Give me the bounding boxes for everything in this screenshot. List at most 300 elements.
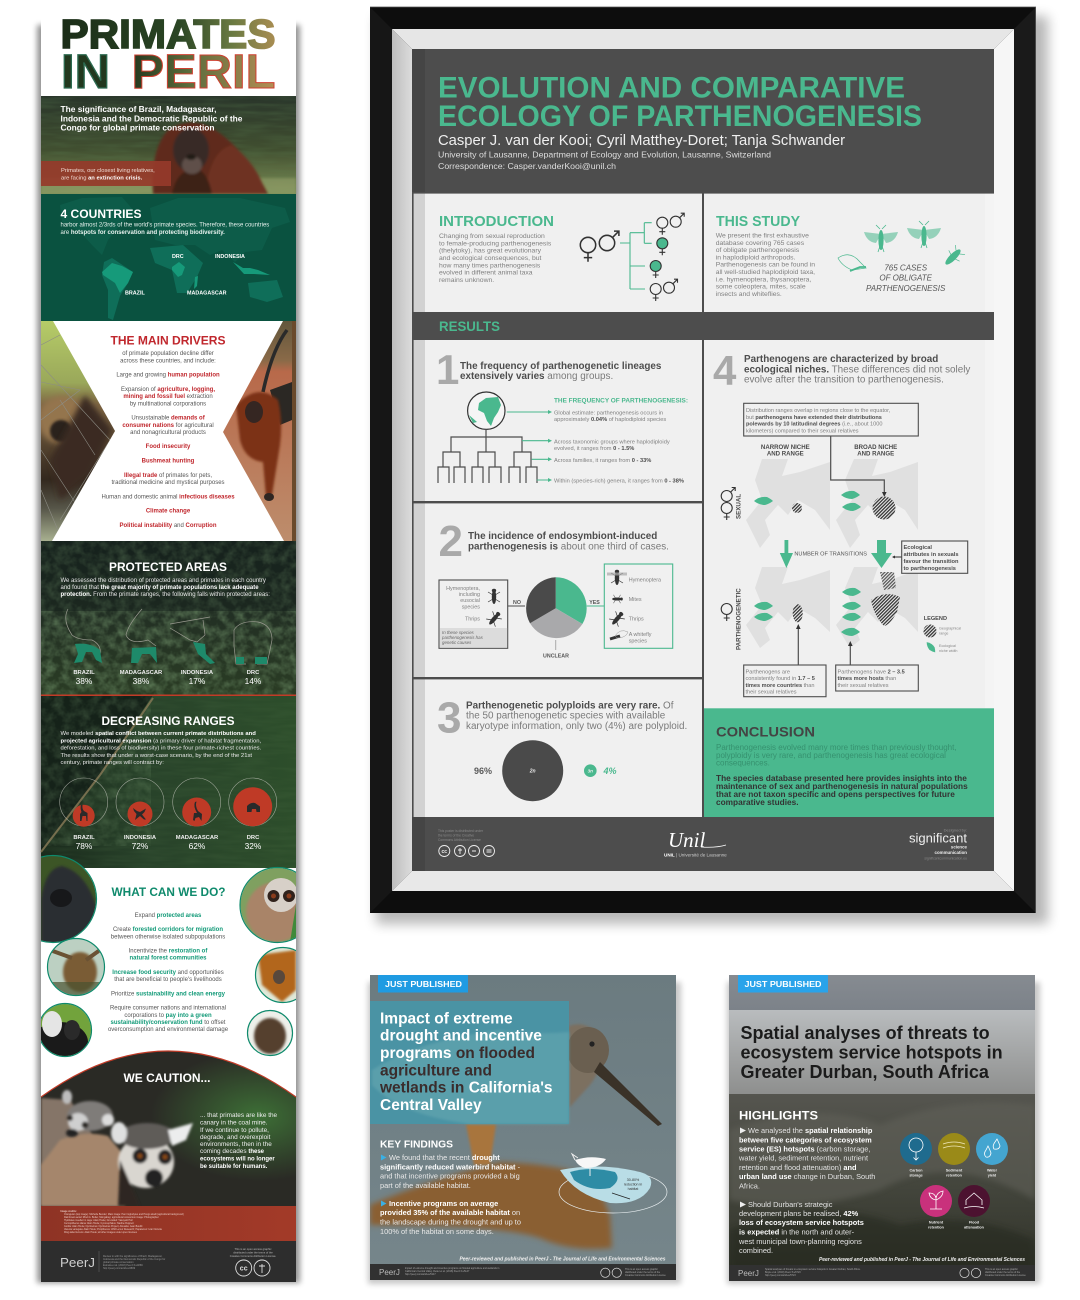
row label: parthenogenetic: PARTHENOGENETIC: [736, 588, 742, 650]
range contraction values: 32%: [245, 841, 262, 851]
arrows: number of transitions: NUMBER OF TRANSITIONS: [794, 552, 867, 558]
column labels: BROAD NICHE: [854, 444, 897, 451]
box: no endosymbionts: [439, 580, 508, 648]
panel: parthenogenesis poster: [370, 7, 1036, 913]
footer: Spatial analyses of threats to ecosystem service hotspots in Greater Durban, South Africa.: [765, 1268, 861, 1271]
arrows: green: [507, 410, 552, 482]
text: conclusion bold: that are not taxon specific and opens perspectives for future: [716, 789, 955, 799]
footer: http://peerj.com/articles/5147: [405, 1273, 436, 1276]
text: caution: degrade, and overexploit: [200, 1134, 271, 1141]
text: key findings: provided 35% of the available habitat on: [380, 1208, 520, 1217]
logo: unil: [664, 828, 727, 858]
logo: unil: UNIL | Université de Lausanne: [664, 852, 727, 858]
panel: result 3: [437, 694, 687, 801]
heading: protected areas: PROTECTED AREAS: [109, 561, 227, 574]
panel: result 2: [438, 517, 673, 660]
text: drivers list: Bushmeat hunting: [142, 458, 195, 464]
title box: Impact of extreme: [380, 1010, 513, 1027]
text: protected areas intro: protection. From the primate ranges, the following falls within protected areas:: [60, 592, 270, 598]
text: this study body: database covering 765 cases: [716, 240, 805, 247]
photo: hills: [729, 1102, 1035, 1206]
range contraction values: [73, 835, 262, 851]
protected area values: [73, 670, 262, 686]
text: highlights: We analysed the spatial relationship: [748, 1126, 872, 1135]
text: introduction body: remains unknown.: [439, 277, 494, 284]
title box: Central Valley: [380, 1097, 482, 1114]
chart: phylogeny tree: [438, 429, 537, 483]
panel: introduction: INTRODUCTION: [439, 213, 554, 230]
text: drivers list: mining and fossil fuel extraction: [123, 394, 213, 400]
text: finding 1: The frequency of parthenogenetic lineages: [460, 361, 662, 372]
footer: distributed under the terms of the: [985, 1271, 1021, 1274]
text: 765 cases: OF OBLIGATE: [879, 274, 933, 283]
column labels: AND RANGE: [857, 450, 894, 457]
text: drivers list: and nonagricultural products: [130, 430, 206, 436]
maps: europe: [746, 459, 918, 648]
icon: orangutan photo: [153, 122, 268, 194]
footer: peerj: Estrada et al. (2018) PeerJ 6:e4869: [103, 1264, 143, 1267]
title: Greater Durban, South Africa: [740, 1062, 990, 1082]
text: conclusion body: Parthenogenesis evolved many more times than previously thought,: [716, 743, 957, 752]
range contraction values: MADAGASCAR: [176, 835, 219, 841]
country labels: BRAZIL: [125, 290, 145, 296]
text: drivers list: Unsustainable demands of: [131, 416, 206, 422]
callout: hosts: times more hosts than: [838, 676, 896, 682]
text: drivers list: [101, 351, 235, 529]
legend: LEGEND: [924, 616, 947, 622]
text: drivers list: Climate change: [146, 508, 191, 514]
box: no endosymbionts: including: [459, 592, 480, 598]
icon: drc gorilla outline: [234, 622, 272, 664]
text: finding 3: karyotype information, only two (4%) are polyploid.: [466, 721, 687, 732]
text: decreasing ranges intro: We modeled spatial conflict between current primate distributions and: [60, 731, 256, 737]
text: actions list: corporations to pay into a green: [124, 1013, 212, 1019]
text: drivers list: by multinational corporations: [130, 402, 206, 408]
callout: distribution: polewards by 10 latitudinal degrees (i.e., about 1000: [746, 422, 882, 428]
footer: PeerJ: [379, 1268, 400, 1277]
text: this study body: i.e. hymenoptera, thysanoptera,: [716, 276, 811, 283]
icons: ecosystem services: Water: [987, 1168, 998, 1172]
panel: result 1: [436, 346, 688, 484]
box: no endosymbionts: Thrips: [465, 616, 480, 622]
callout: countries: [744, 624, 826, 697]
footer: distributed under the terms of the: [625, 1271, 661, 1274]
country labels: [125, 254, 245, 296]
text: actions list: that are beneficial to people's livelihoods: [114, 977, 222, 983]
legend: [924, 616, 961, 654]
box: yes endosymbionts: Mites: [629, 597, 642, 603]
image credits bar: Rainforest aerial: Rhett A. Butler, Mongabay; agricultural conversion image: Photographer: [64, 1216, 159, 1219]
icons: ecosystem services: yield: [988, 1173, 997, 1177]
callout: extinction crisis: Primates, our closest living relatives,: [61, 168, 155, 174]
icons: ecosystem services: storage: [909, 1173, 923, 1177]
photo: black and white lemur: [41, 1002, 92, 1058]
logo: unil: Unil: [668, 828, 706, 852]
chart: endosymbiont pie: UNCLEAR: [543, 654, 569, 660]
text: 765 cases: 765 CASES: [884, 264, 928, 272]
panel: 4 countries: [41, 194, 296, 321]
callout: ecological attributes: [902, 541, 968, 573]
icons: ecosystem services: Sediment: [946, 1168, 963, 1172]
row label: parthenogenetic: [721, 588, 742, 650]
text: finding 2: parthenogenesis is about one third of cases.: [468, 542, 669, 552]
text: finding 2: The incidence of endosymbiont-induced: [468, 531, 657, 542]
text: key findings: the landscape during the drought and up to: [380, 1218, 521, 1227]
title box: wetlands in California's: [380, 1080, 553, 1097]
text: frequency list: Within (species-rich) genera, it ranges from 0 - 38%: [554, 478, 684, 484]
chart: ploidy circles: 96%: [474, 766, 492, 776]
box: yes endosymbionts: [604, 564, 673, 648]
box: yes endosymbionts: Hymenoptera: [629, 578, 661, 584]
text: conclusion bold: The species database presented here provides insights into the: [716, 773, 967, 783]
chart: ploidy circles: 3n: [588, 768, 593, 774]
text: drivers list: Political instability and Corruption: [119, 523, 217, 529]
diagram: habitat reduction: [559, 1154, 667, 1213]
text: actions list: natural forest communities: [129, 956, 207, 962]
title band: [41, 0, 296, 99]
panel: orangutan hero: [41, 96, 296, 194]
callout: extinction crisis: [41, 161, 171, 186]
diagram: habitat reduction: habitat: [628, 1187, 638, 1191]
text: conclusion body: consequences.: [716, 758, 770, 768]
text: caution: canary in the coal mine.: [200, 1120, 268, 1126]
icons: bullets: [381, 1154, 386, 1206]
heading: 4 countries: 4 COUNTRIES: [60, 209, 142, 221]
text: conclusion body: polyploidy is very rare, and parthenogenesis has great ecological: [716, 751, 946, 760]
title box: drought and incentive: [380, 1028, 542, 1045]
highlighted countries: [102, 262, 270, 293]
text: caution: ... that primates are like the: [200, 1112, 278, 1119]
icons: ecosystem services: Flood: [969, 1220, 980, 1224]
panel: this study: THIS STUDY: [716, 213, 800, 230]
text: actions list: sustainability/conservation fund to offset: [111, 1020, 226, 1026]
text: this study body: in haplodiploid arthropods.: [716, 254, 796, 261]
protected area values: 38%: [133, 676, 150, 686]
icon: globe: [468, 392, 505, 429]
text: drivers list: Expansion of agriculture, logging,: [121, 387, 215, 393]
text: decreasing ranges intro: The results show that under a worst-case scenario, by the end of the 21st: [60, 753, 252, 759]
text: this study body: some coleoptera, mites, scale: [716, 284, 806, 291]
title box: agriculture and: [380, 1062, 492, 1079]
title: Spatial analyses of threats to: [740, 1023, 990, 1043]
title box: [370, 1001, 569, 1124]
footer: peerj: [41, 1241, 296, 1282]
logo: significant: Designed by:: [944, 828, 967, 832]
callout: hosts: Parthenogens have 2 – 3.5: [838, 670, 905, 676]
icon: indonesia gibbon outline: [170, 617, 215, 664]
text: caution: be suitable for humans.: [200, 1164, 268, 1170]
range contraction values: BRAZIL: [73, 835, 95, 841]
panel: introduction: [439, 213, 684, 301]
text: this study body: Parthenogenesis can be found in: [716, 262, 815, 269]
results bar: RESULTS: [439, 319, 500, 334]
panel: main drivers: [38, 321, 296, 541]
text: finding 3: Parthenogenetic polyploids are very rare. Of: [466, 700, 673, 712]
photo: brown monkey: [46, 936, 106, 998]
poster footer: This poster is distributed under: [438, 829, 484, 833]
text: highlights: combined.: [739, 1246, 773, 1255]
footer: This is an open access graphic: [625, 1268, 659, 1271]
photo: ring-tailed lemurs: [41, 1090, 193, 1206]
leaves and ranges: [754, 491, 900, 636]
box: no endosymbionts: species: [462, 604, 480, 610]
poster footer: Commons Attribution License: [438, 838, 481, 842]
icon: creative commons: [236, 1260, 270, 1276]
range contraction values: 72%: [132, 841, 149, 851]
callout: ecological attributes: attributes in sexuals: [904, 552, 958, 558]
footer: Creative Commons Attribution License: [985, 1274, 1026, 1277]
footer: Impact of extreme drought and incentive programs on flooded agriculture and wetlands in: [405, 1267, 500, 1270]
image credits bar: Image credits:: [60, 1210, 77, 1213]
text: drivers list: traditional medicine and mystical purposes: [111, 480, 225, 486]
callout: hosts: their sexual relatives: [838, 683, 889, 689]
arrows: number of transitions: [780, 540, 902, 568]
chart: endosymbiont pie: [508, 577, 604, 660]
arrow: distribution: [831, 436, 887, 497]
icons: ecosystem services: retention: [928, 1225, 945, 1229]
text: this study body: of obligate parthenogenesis: [716, 247, 800, 254]
protected area values: BRAZIL: [73, 670, 95, 676]
protected area values: 14%: [245, 676, 262, 686]
column labels: AND RANGE: [767, 450, 804, 457]
text: key findings: and that incentive programs provided a big: [380, 1172, 520, 1180]
text: highlights: Should Durban's strategic: [748, 1200, 833, 1209]
callout: distribution: [744, 403, 918, 436]
text: highlights: loss of ecosystem service hotspots: [739, 1218, 864, 1227]
text: finding 4: ecological niches. These differences did not solely: [744, 364, 970, 375]
text: key findings: 100% of the habitat on some days.: [380, 1227, 494, 1236]
row label: sexual: SEXUAL: [736, 494, 742, 519]
diagram: habitat reduction: 30-80%: [627, 1178, 640, 1182]
text: introduction body: how many times parthenogenesis: [439, 262, 541, 269]
image credits bar: Ring-tailed lemurs: Alain Houle; all other images under open licenses: [64, 1231, 138, 1234]
footer: peerj: Indonesia and the Democratic Republic of the Congo for: [103, 1258, 165, 1261]
panel: conclusion: CONCLUSION: [716, 724, 815, 740]
footer: peerj: global primate conservation: [103, 1261, 134, 1264]
icon: insects: [838, 221, 966, 271]
text: introduction body: evolved in different animal taxa: [439, 270, 533, 277]
logo: significant: [909, 828, 968, 860]
box: no endosymbionts: parthenogenesis has: [441, 635, 484, 640]
text: frequency list: Across families, it ranges from 0 - 33%: [554, 458, 651, 464]
text: introduction body: Changing from sexual reproduction: [439, 233, 545, 240]
box: yes endosymbionts: species: [629, 638, 647, 644]
legend: range: [939, 632, 948, 636]
heading: what can we do: WHAT CAN WE DO?: [112, 885, 226, 899]
poster frame: [370, 7, 1036, 913]
icon: madagascar lemur outline: [126, 609, 157, 663]
icons: ecosystem services: Carbon: [910, 1168, 923, 1172]
poster header: ECOLOGY OF PARTHENOGENESIS: [438, 100, 922, 133]
panel: primates in peril infographic: [40, 18, 296, 1282]
text: finding 4: evolve after the transition to parthenogenesis.: [744, 374, 944, 385]
text: finding 4: Parthenogens are characterized by broad: [744, 354, 938, 365]
text: this study body: all well-studied haplodiploid taxa,: [716, 269, 815, 276]
footer: Creative Commons Attribution License: [625, 1274, 666, 1277]
photo: wading bird: [370, 1024, 662, 1249]
poster header: Correspondence: Casper.vanderKooi@unil.ch: [438, 161, 616, 171]
legend: niche width: [939, 649, 957, 653]
world map: [60, 197, 290, 320]
text: frequency list: Across taxonomic groups where haplodiploidy: [554, 440, 670, 446]
text: key findings: significantly reduced waterbird habitat -: [380, 1162, 520, 1172]
text: introduction body: and ecological consequences, but: [439, 255, 542, 262]
column labels: NARROW NICHE: [761, 444, 810, 451]
callout: distribution: Distribution ranges overlap in regions close to the equator,: [746, 408, 891, 414]
subtitle: Indonesia and the Democratic Republic of the: [60, 114, 243, 124]
title: ecosystem service hotspots in: [740, 1042, 1003, 1062]
citation: Peer-reviewed and published in PeerJ - The Journal of Life and Environmental Sciences: [460, 1256, 666, 1262]
text: key findings: part of the available habitat.: [380, 1181, 471, 1190]
country labels: INDONESIA: [215, 254, 245, 260]
footer: PeerJ: [738, 1269, 759, 1278]
image credits bar: [41, 1206, 296, 1241]
text: highlights: development plans be realised, 42%: [739, 1209, 858, 1218]
panel: what can we do: [41, 854, 296, 1096]
legend: Geographical: [939, 626, 961, 630]
icons: ecosystem services: attenuation: [964, 1225, 985, 1229]
panel dividers: [412, 192, 994, 817]
callout: ecological attributes: favour the transition: [904, 559, 959, 565]
text: drivers list: Large and growing human population: [116, 372, 220, 378]
icon: cc licences: [439, 846, 494, 856]
panel: result 4: 4: [713, 347, 737, 394]
image credits bar: Varecia variegata: Alain Houle; Propithecus: Wild Lemur Research; Hapalemur: Ivan Norscia: [64, 1228, 162, 1231]
text: drivers list: Food insecurity: [146, 444, 191, 450]
text: actions list: [108, 913, 229, 1033]
icons: ecosystem services: [900, 1133, 1008, 1229]
footer: peerj: PeerJ: [60, 1255, 95, 1270]
text: highlights: between five categories of ecosystem: [739, 1135, 872, 1144]
text: decreasing ranges intro: century, primate ranges will contract by:: [60, 760, 164, 766]
text: highlights: water yield, sediment retention, nutrient: [738, 1154, 868, 1163]
badge: just published: [738, 975, 828, 992]
poster header: [412, 49, 994, 192]
heading: key findings: KEY FINDINGS: [380, 1140, 453, 1150]
callout: extinction crisis: are facing an extinction crisis.: [61, 176, 142, 182]
range contraction values: 78%: [76, 841, 93, 851]
photo: gorilla: [41, 854, 98, 944]
text: drivers list: Human and domestic animal infectious diseases: [101, 494, 235, 500]
text: actions list: overconsumption and environmental damage: [108, 1027, 229, 1033]
column labels: [761, 444, 897, 457]
box: yes endosymbionts: Thrips: [629, 616, 644, 622]
text: actions list: Require consumer nations and international: [110, 1006, 226, 1012]
text: highlights: service (ES) hotspots (carbon storage,: [739, 1145, 870, 1154]
text: conclusion bold: maintenance of sex and parthenogenesis in natural populations: [716, 781, 968, 791]
footer: California's Central Valley. Reiter et al. (2018) PeerJ 6:e5147: [405, 1270, 470, 1273]
footer: peerj: Creative Commons Attribution License.: [230, 1254, 276, 1258]
title band: IN: [61, 46, 110, 99]
chart: ploidy circles: 2n: [529, 768, 536, 774]
panel: we caution: [41, 1051, 296, 1282]
text: key findings: We found that the recent drought: [389, 1153, 500, 1162]
poster header: EVOLUTION AND COMPARATIVE: [438, 72, 905, 104]
chart: range contraction circles: [60, 778, 277, 827]
title band: PRIMATES: [60, 11, 276, 57]
callout: distribution: kilometers) compared to their sexual relatives: [746, 428, 859, 434]
panel: result 4: [713, 347, 970, 697]
poster footer: the terms of the Creative: [438, 834, 474, 838]
footer: [729, 1265, 1035, 1281]
text: actions list: between otherwise isolated subpopulations: [111, 934, 225, 940]
text: introduction body: (thelytoky), has great evolutionary: [439, 248, 542, 255]
citation: Peer-reviewed and published in PeerJ - The Journal of Life and Environmental Sciences: [819, 1257, 1025, 1263]
image credits bar: Orangutan (top image): Michelle Bender; Main image: Pan troglodytes and Pongo abelii (agricultural background): [64, 1213, 184, 1216]
text: highlights: west municipal town-planning regions: [738, 1237, 862, 1246]
text: countries intro: harbor almost 2/3rds of the world's primate species. Therefore, these countries: [60, 222, 269, 228]
photo: woolly lemur: [246, 1010, 294, 1058]
callout: distribution: but parthenogens have extended their distributions: [746, 415, 882, 421]
icon: brazil monkey outline: [66, 609, 102, 663]
icon: cc licences: cc: [442, 849, 447, 855]
callout: countries: consistently found in 1.7 – 5: [746, 676, 815, 682]
icons: bullets: [740, 1128, 746, 1208]
text: actions list: Incentivize the restoration of: [129, 948, 208, 954]
badge: just published: JUST PUBLISHED: [744, 979, 822, 989]
badge: just published: [378, 975, 468, 992]
box: no endosymbionts: In these species: [442, 630, 475, 635]
photo: red-furred monkey: [223, 321, 296, 541]
badge: just published: JUST PUBLISHED: [385, 979, 462, 989]
chart: ploidy circles: [474, 740, 617, 801]
callout: hosts: [836, 641, 918, 691]
icon: creative commons: cc: [240, 1266, 248, 1272]
icons: ecosystem services: retention: [946, 1173, 963, 1177]
footer: peerj: http://peerj.com/articles/4869: [103, 1267, 136, 1270]
title band: PERIL: [132, 46, 276, 99]
callout: countries: times more countries than: [746, 683, 815, 689]
results bar: [412, 312, 994, 340]
legend: Ecological: [939, 644, 956, 648]
chart: ploidy circles: 4%: [602, 766, 617, 776]
protected area values: INDONESIA: [181, 670, 214, 676]
protected area values: MADAGASCAR: [120, 670, 163, 676]
text: drivers list: of primate population decline differ: [122, 351, 214, 357]
protected area values: DRC: [247, 670, 260, 676]
photo: howler monkey: [254, 946, 296, 1004]
text: 765 cases: PARTHENOGENESIS: [866, 284, 946, 293]
footer: peerj: This is an open access graphic: [235, 1247, 272, 1251]
text: highlights: is expected in the north and outer-: [739, 1228, 854, 1237]
range contraction values: 62%: [189, 841, 206, 851]
protected area values: 38%: [76, 676, 93, 686]
callout: ecological attributes: Ecological: [904, 545, 932, 551]
country labels: DRC: [172, 254, 184, 260]
text: introduction body: to female-producing parthenogenesis: [439, 240, 552, 247]
text: highlights: Africa.: [739, 1181, 760, 1190]
text: countries intro: are hotspots for conservation and protecting biodiversity.: [60, 230, 225, 236]
text: frequency list: Global estimate: parthenogenesis occurs in: [554, 410, 663, 416]
heading: main drivers: THE MAIN DRIVERS: [110, 334, 226, 348]
heading: decreasing ranges: DECREASING RANGES: [102, 715, 235, 728]
box: no endosymbionts: eusocial: [460, 598, 480, 604]
callout: countries: their sexual relatives: [746, 690, 797, 696]
footer: http://peerj.com/articles/5723: [765, 1274, 796, 1277]
panel: conclusion: [704, 708, 994, 817]
text: protected areas intro: and found that the great majority of primate populations lack adequate: [60, 585, 259, 591]
text: decreasing ranges intro: deforestation, and loss of biodiversity) in these four primate-richest countries.: [60, 746, 262, 752]
footer: This is an open access graphic: [985, 1268, 1019, 1271]
title box: programs on flooded: [380, 1045, 535, 1062]
panel: decreasing ranges: [41, 696, 296, 868]
text: protected areas intro: We assessed the distribution of protected areas and primates in each country: [60, 578, 266, 584]
panel: result 2: 2: [438, 517, 463, 566]
footer: peerj: distributed under the terms of the: [233, 1250, 273, 1254]
text: this study body: insects and whiteflies.: [716, 291, 782, 298]
text: actions list: Create forested corridors for migration: [113, 927, 223, 933]
text: key findings: Incentive programs on average: [389, 1199, 498, 1208]
